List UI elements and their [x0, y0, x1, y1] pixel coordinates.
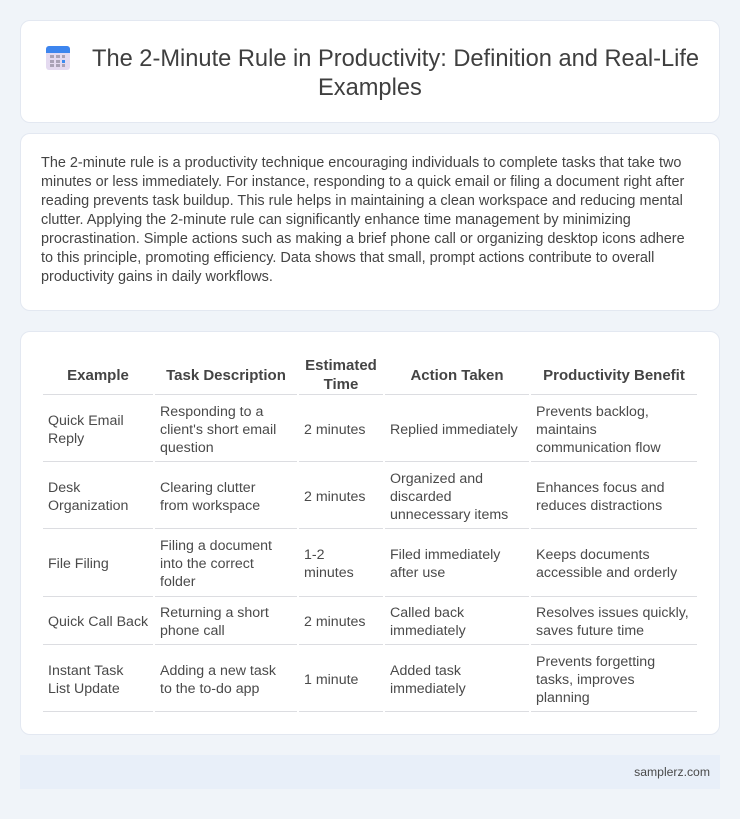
table row: File Filing — [48, 538, 678, 590]
table row: Desk Organization: Desk — [48, 480, 80, 496]
text block: intro paragraph: reading prevents task buildup. This rule helps in maintaining a clean workspace and reducing mental — [41, 193, 683, 209]
heading: title: The 2-Minute Rule in Productivity: Definition and Real-Life — [92, 46, 699, 72]
table row: Quick Email Reply: Replied immediately — [390, 422, 518, 438]
table row: Instant Task List Update: Prevents forgetting — [536, 654, 655, 670]
text block: intro paragraph: The 2-minute rule is a productivity technique encouraging individuals to complete tasks that take two — [41, 155, 681, 171]
heading: title: Examples — [318, 75, 422, 101]
table row: Desk Organization: Clearing clutter — [160, 480, 255, 496]
table row: File Filing: Filed immediately — [390, 547, 500, 563]
icon: calendar — [46, 46, 70, 70]
table header row: Action Taken — [410, 367, 504, 384]
table row: Instant Task List Update: tasks, improves — [536, 672, 635, 688]
heading: title — [92, 46, 699, 101]
table row: Instant Task List Update: Added task — [390, 663, 461, 679]
table header row: Example — [67, 367, 129, 384]
text block: intro paragraph — [41, 155, 685, 285]
table row: File Filing: Keeps documents — [536, 547, 650, 563]
table row: Quick Call Back: Called back — [390, 605, 464, 621]
table row: File Filing: accessible and orderly — [536, 565, 677, 581]
text block: intro paragraph: productivity gains in daily workflows. — [41, 269, 273, 285]
table row: Desk Organization — [48, 471, 665, 523]
table row: Desk Organization: Enhances focus and — [536, 480, 665, 496]
table header row: Estimated — [305, 357, 377, 374]
table row: Desk Organization: from workspace — [160, 498, 260, 514]
table row: Desk Organization: Organization — [48, 498, 128, 514]
table row: Quick Email Reply: question — [160, 440, 214, 456]
table row: Quick Call Back: Returning a short — [160, 605, 269, 621]
table row: File Filing: after use — [390, 565, 445, 581]
table row: Instant Task List Update: List Update — [48, 681, 120, 697]
text block: intro paragraph: procrastination. Simple actions such as making a brief phone call or organizing desktop icons adhere — [41, 231, 685, 247]
table row: Quick Email Reply: Responding to a — [160, 404, 263, 420]
table row: File Filing: Filing a document — [160, 538, 272, 554]
table row: Quick Call Back: 2 minutes — [304, 614, 366, 630]
table row: Desk Organization: reduces distractions — [536, 498, 662, 514]
table header row: Task Description — [166, 367, 286, 384]
table row: Quick Email Reply: communication flow — [536, 440, 661, 456]
table header row — [67, 357, 685, 393]
table row: Instant Task List Update: Adding a new task — [160, 663, 276, 679]
text block: intro paragraph: minutes or less immediately. For instance, responding to a quick email or filing a document right after — [41, 174, 684, 190]
table row: Quick Email Reply: Quick Email — [48, 413, 124, 429]
table row: Quick Call Back — [48, 605, 689, 639]
table row: Quick Email Reply: client's short email — [160, 422, 276, 438]
table row: Quick Email Reply: maintains — [536, 422, 597, 438]
table row: Desk Organization: unnecessary items — [390, 507, 508, 523]
table row: Instant Task List Update: immediately — [390, 681, 466, 697]
table: examples — [43, 357, 697, 712]
table row: Desk Organization: Organized and — [390, 471, 483, 487]
table row: File Filing: folder — [160, 574, 196, 590]
table row: Quick Email Reply: Reply — [48, 431, 84, 447]
table row: Instant Task List Update: to the to-do app — [160, 681, 259, 697]
footer bar — [20, 755, 720, 789]
panel: intro paragraph card — [20, 133, 720, 311]
table row: Quick Call Back: saves future time — [536, 623, 644, 639]
text block: intro paragraph: to this principle, promoting efficiency. Data shows that small, prompt actions contribute to overall — [41, 250, 654, 266]
table row: File Filing: File Filing — [48, 556, 109, 572]
table row: Quick Call Back: Resolves issues quickly, — [536, 605, 689, 621]
text block: intro paragraph: clutter. Applying the 2-minute rule can significantly enhance time management by minimizing — [41, 212, 631, 228]
table row: File Filing: into the correct — [160, 556, 254, 572]
table row: File Filing: minutes — [304, 565, 354, 581]
footer text: samplerz.com — [634, 765, 710, 779]
table row: Instant Task List Update: 1 minute — [304, 672, 358, 688]
table row: Quick Email Reply: 2 minutes — [304, 422, 366, 438]
table row: Instant Task List Update — [48, 654, 655, 706]
table row: Quick Call Back: Quick Call Back — [48, 614, 148, 630]
table row: File Filing: 1-2 — [304, 547, 325, 563]
table header row: Time — [324, 376, 358, 393]
table row: Quick Call Back: immediately — [390, 623, 466, 639]
table row: Quick Email Reply — [48, 404, 661, 456]
table row: Instant Task List Update: Instant Task — [48, 663, 123, 679]
table row: Instant Task List Update: planning — [536, 690, 590, 706]
table row: Quick Call Back: phone call — [160, 623, 225, 639]
table row: Desk Organization: 2 minutes — [304, 489, 366, 505]
table row: Quick Email Reply: Prevents backlog, — [536, 404, 649, 420]
panel: examples table card — [20, 331, 720, 735]
table row: Desk Organization: discarded — [390, 489, 452, 505]
table header row: Productivity Benefit — [543, 367, 685, 384]
panel: title card — [20, 20, 720, 123]
